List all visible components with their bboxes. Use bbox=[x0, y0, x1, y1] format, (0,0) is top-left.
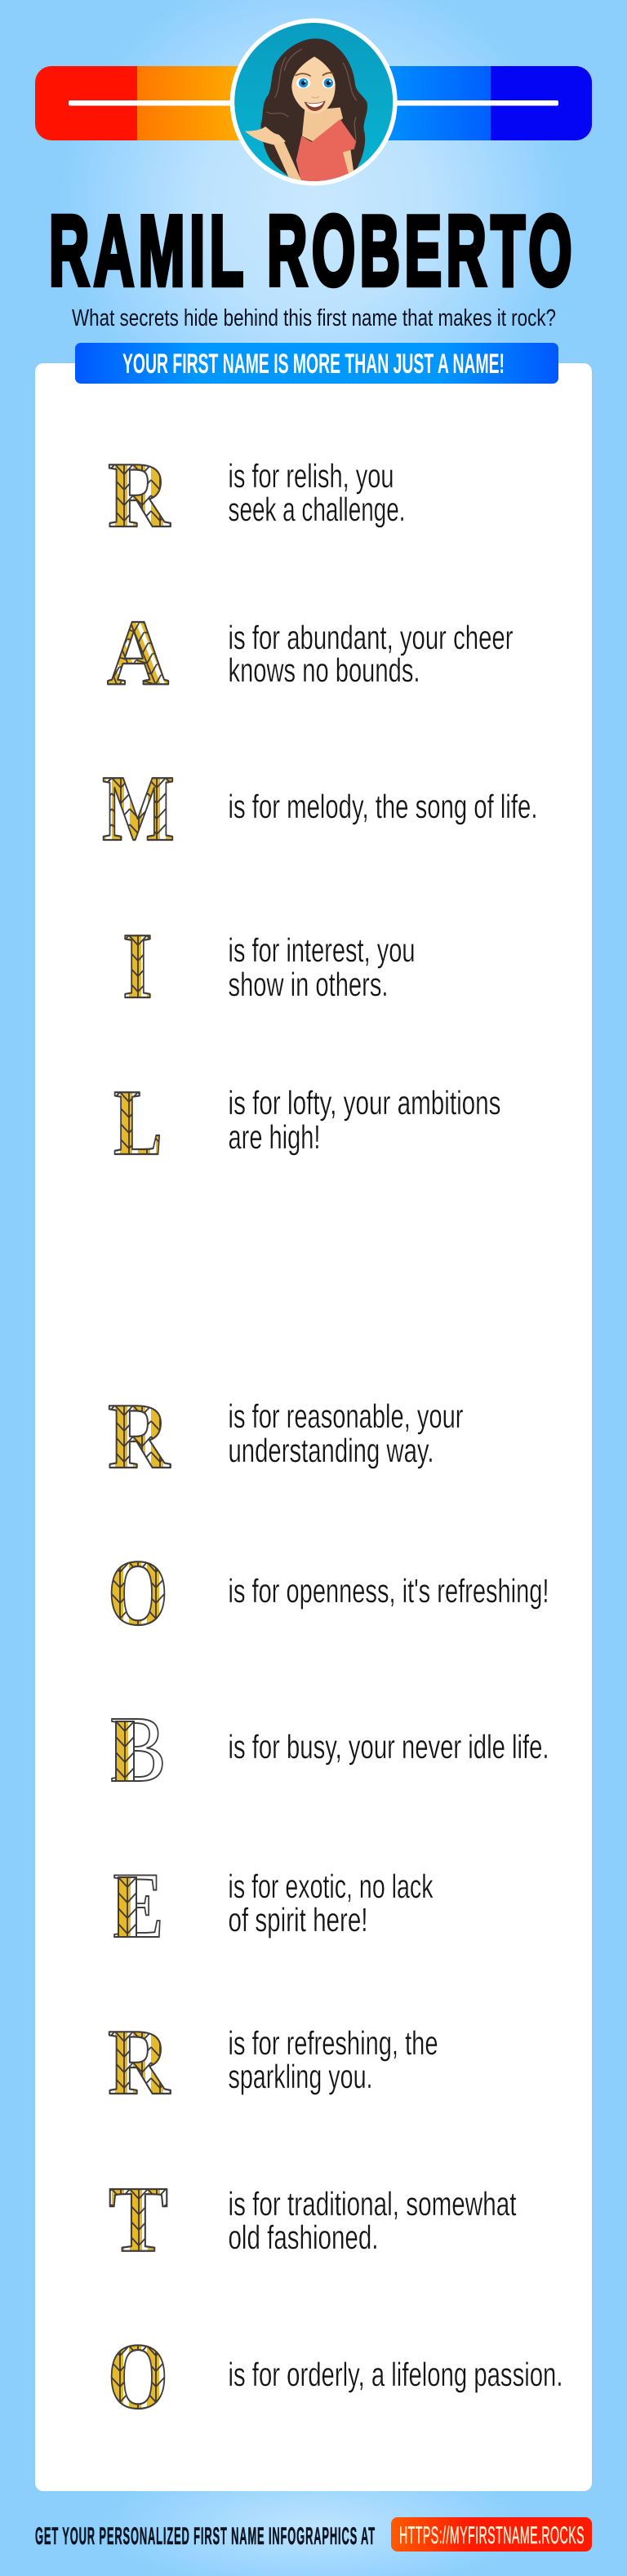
hair highlights bbox=[267, 49, 357, 149]
text: traditional: is for traditional, somewhat bbox=[229, 2185, 517, 2223]
text: abundant: knows no bounds. bbox=[229, 651, 420, 689]
icon: letter R: R bbox=[108, 1384, 171, 1489]
row: T traditional bbox=[109, 2168, 517, 2272]
row: E exotic bbox=[112, 1854, 434, 1958]
mouth bbox=[305, 100, 326, 111]
text: refreshing: sparkling you. bbox=[229, 2058, 372, 2095]
icon: letter T: T bbox=[109, 2168, 168, 2272]
text: relish: is for relish, you bbox=[229, 457, 394, 495]
text: reasonable: understanding way. bbox=[229, 1432, 434, 1469]
text: reasonable: is for reasonable, your bbox=[229, 1397, 464, 1435]
row: B busy bbox=[109, 1698, 549, 1802]
right eye bbox=[322, 78, 335, 88]
row: R reasonable bbox=[108, 1384, 464, 1489]
nose bbox=[312, 96, 319, 98]
header colour bar bbox=[35, 66, 592, 140]
left eye bbox=[296, 78, 310, 88]
icon: letter L: L bbox=[113, 1071, 162, 1175]
icon: letter A: A bbox=[107, 601, 169, 705]
avatar: cartoon woman in circle bbox=[230, 18, 398, 186]
footer url button bbox=[391, 2517, 592, 2552]
icon: letter B: B bbox=[109, 1698, 167, 1802]
text: abundant: is for abundant, your cheer bbox=[229, 619, 513, 656]
text: traditional: old fashioned. bbox=[229, 2218, 379, 2256]
text: interest: show in others. bbox=[229, 966, 389, 1003]
eyebrows bbox=[296, 73, 333, 76]
text: lofty: is for lofty, your ambitions bbox=[229, 1084, 501, 1121]
row: R relish bbox=[108, 443, 405, 548]
text: exotic: of spirit here! bbox=[229, 1901, 367, 1939]
teeth bbox=[306, 102, 323, 107]
row: M melody bbox=[102, 757, 537, 861]
row: A abundant bbox=[107, 601, 513, 705]
icon: letter R: R bbox=[108, 2010, 171, 2115]
text: interest: is for interest, you bbox=[229, 931, 415, 969]
icon: letter R: R bbox=[108, 443, 171, 548]
icon: letter O: O bbox=[108, 1541, 168, 1646]
icon: letter O: O bbox=[108, 2325, 168, 2429]
right arm bbox=[345, 144, 349, 182]
hair bbox=[260, 38, 367, 178]
row: R refreshing bbox=[108, 2010, 438, 2115]
row: I interest bbox=[122, 914, 415, 1019]
background glow: bottom bbox=[0, 2457, 627, 2576]
icon: letter E: E bbox=[112, 1854, 164, 1958]
content card bbox=[35, 363, 592, 2491]
row: L lofty bbox=[113, 1071, 501, 1175]
text: lofty: are high! bbox=[229, 1118, 320, 1156]
icon: letter I: I bbox=[122, 914, 153, 1019]
icon: letter M: M bbox=[102, 757, 175, 861]
face bbox=[291, 56, 336, 113]
neck bbox=[302, 108, 343, 141]
text: relish: seek a challenge. bbox=[229, 491, 405, 528]
forearm bbox=[278, 140, 296, 182]
row: O openness bbox=[108, 1541, 549, 1646]
shirt bbox=[296, 119, 356, 185]
background glow: top bbox=[0, 0, 627, 457]
text: refreshing: is for refreshing, the bbox=[229, 2024, 438, 2062]
text: exotic: is for exotic, no lack bbox=[229, 1868, 434, 1905]
banner bbox=[75, 343, 558, 384]
hand bbox=[245, 127, 286, 144]
row: O orderly bbox=[108, 2325, 563, 2429]
